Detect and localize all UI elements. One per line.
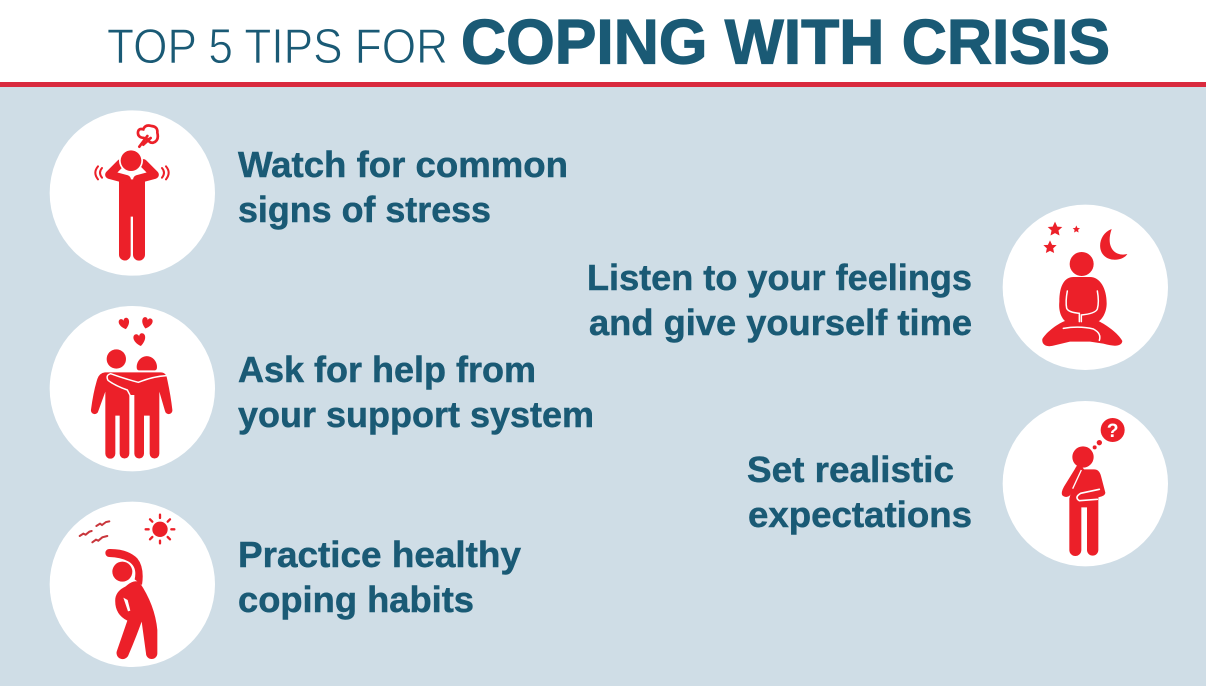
question mark: ? (1107, 421, 1119, 442)
tip 2 text: ask for help: your support system (238, 394, 594, 435)
tip 3 text: healthy coping habits: Practice healthy (238, 534, 522, 575)
tip 4 text: listen to your feelings: and give yourself time (589, 302, 972, 343)
tip 1 text: watch for signs of stress: Watch for common (238, 144, 568, 185)
title (107, 8, 1110, 78)
tip 5 text: realistic expectations: Set realistic (747, 449, 954, 490)
tip 4 text: listen to your feelings: Listen to your feelings (587, 257, 972, 298)
tip 3 text: healthy coping habits: coping habits (238, 579, 474, 620)
tip 4 text: listen to your feelings (587, 257, 972, 343)
icon: thinking person with question bubble (1003, 401, 1168, 566)
tip 2 text: ask for help: Ask for help from (238, 349, 536, 390)
tip 1 text: watch for signs of stress: signs of stress (238, 189, 491, 230)
tip 3 text: healthy coping habits (238, 534, 522, 620)
icon: two people embracing (50, 306, 215, 471)
title: bold emphasis: COPING WITH CRISIS (461, 8, 1110, 78)
header divider: red rule (0, 82, 1206, 87)
title: light prefix: TOP 5 TIPS FOR (107, 20, 448, 74)
tip 2 text: ask for help (238, 349, 594, 435)
tip 1 text: watch for signs of stress (238, 144, 568, 230)
icon: stressed person (50, 110, 215, 276)
tip 5 text: realistic expectations (747, 449, 972, 535)
tip 5 text: realistic expectations: expectations (748, 494, 972, 535)
icon: person stretching with sun and birds (50, 502, 215, 667)
icon: meditating person with moon and stars (1003, 205, 1168, 370)
